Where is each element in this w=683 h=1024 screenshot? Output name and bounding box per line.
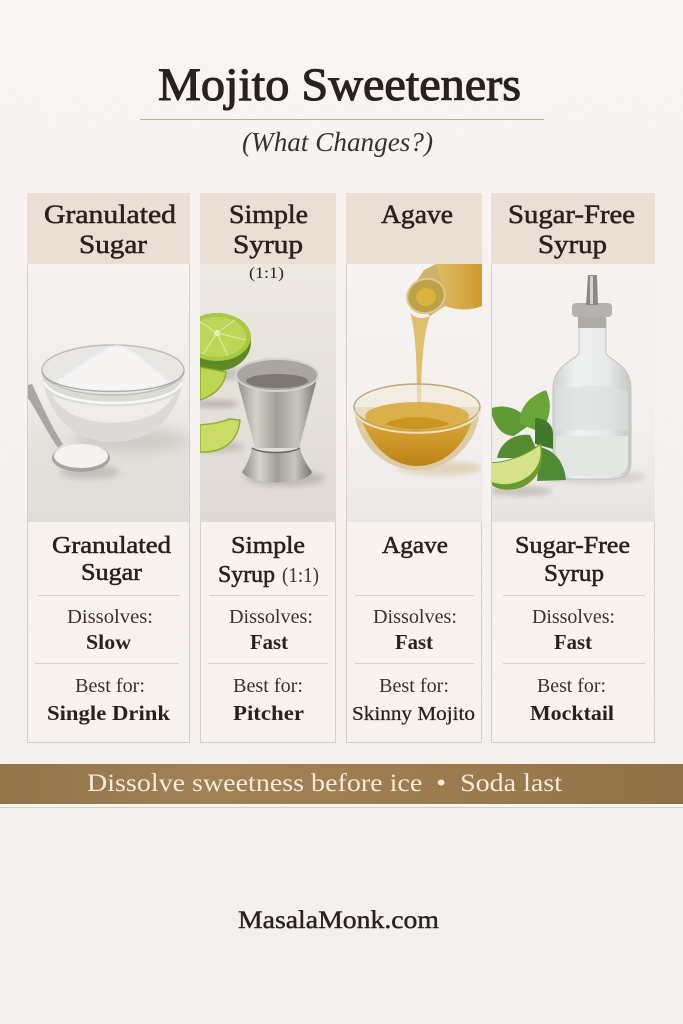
- panel header: Syrup: [538, 230, 607, 259]
- panel header: [346, 193, 482, 264]
- subtitle: (What Changes?): [242, 127, 433, 157]
- panel header: Syrup: [233, 230, 303, 259]
- product name: Sugar: [81, 560, 142, 586]
- dissolves: fast: Dissolves:: [532, 606, 615, 628]
- product name: [52, 533, 171, 586]
- title: Mojito Sweeteners: [158, 59, 521, 111]
- best for: single drink: [47, 675, 170, 725]
- dissolves: fast: [229, 606, 313, 654]
- panel header: Sugar: [79, 230, 147, 259]
- ratio note in header: (1:1): [249, 265, 284, 282]
- dissolves: fast: Fast: [554, 630, 592, 654]
- product name: Agave: [382, 533, 448, 559]
- dissolves: fast: Fast: [395, 630, 433, 654]
- product name: Syrup: [218, 562, 275, 588]
- product name: [218, 533, 319, 588]
- best for: single drink: Single Drink: [47, 701, 170, 725]
- dissolves: slow: Dissolves:: [67, 606, 153, 628]
- product name: Syrup: [544, 561, 604, 587]
- panel: agave: [346, 193, 482, 742]
- best for: single drink: Best for:: [75, 675, 145, 697]
- product name: [515, 533, 630, 587]
- panel header: Granulated: [44, 200, 176, 229]
- panel header: Simple: [229, 200, 308, 229]
- dissolves: fast: Dissolves:: [373, 606, 457, 628]
- photo: jigger and limes: [200, 264, 336, 522]
- footer website: MasalaMonk.com: [238, 907, 440, 934]
- panel: granulated sugar: [27, 193, 190, 742]
- panel header: Agave: [381, 200, 453, 229]
- panel: sugar-free syrup: [488, 193, 655, 742]
- panel header: [200, 193, 336, 264]
- best for: mocktail: [530, 675, 614, 725]
- panel header: [27, 193, 190, 264]
- photo: syrup bottle, mint and lime: [488, 264, 655, 522]
- panel: simple syrup: [200, 193, 336, 743]
- best for: pitcher: Best for:: [233, 675, 303, 697]
- product name: Granulated: [52, 533, 171, 559]
- panel header: [491, 193, 655, 264]
- photo: bowl of sugar and spoon: [28, 344, 189, 522]
- product name: Simple: [231, 533, 305, 559]
- dissolves: slow: [67, 606, 153, 654]
- photo: agave pouring into bowl: [347, 264, 482, 522]
- best for: pitcher: Pitcher: [233, 701, 304, 725]
- dissolves: fast: [532, 606, 615, 654]
- dissolves: fast: [373, 606, 457, 654]
- best for: mocktail: Best for:: [537, 675, 606, 697]
- best for: pitcher: [233, 675, 304, 725]
- best for: skinny mojito: Best for:: [379, 675, 449, 697]
- dissolves: fast: Dissolves:: [229, 606, 313, 628]
- product name: Sugar-Free: [515, 533, 630, 559]
- best for: skinny mojito: Skinny Mojito: [352, 703, 475, 725]
- tip banner: Dissolve sweetness before ice • Soda last: [87, 770, 562, 797]
- dissolves: fast: Fast: [250, 630, 288, 654]
- dissolves: slow: Slow: [86, 630, 132, 654]
- best for: mocktail: Mocktail: [530, 701, 614, 725]
- best for: skinny mojito: [352, 675, 475, 725]
- panel header: Sugar-Free: [508, 200, 635, 229]
- tip banner: [0, 764, 683, 808]
- product name: (1:1): [282, 563, 319, 587]
